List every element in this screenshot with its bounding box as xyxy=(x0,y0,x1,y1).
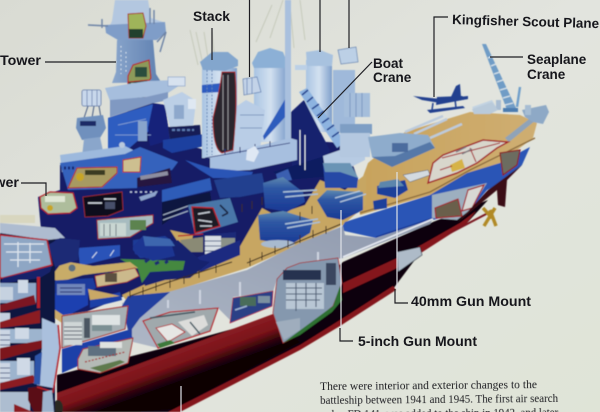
label: Seaplane Crane: Crane xyxy=(527,67,566,82)
radar director: centre xyxy=(233,77,265,158)
aft stacks and directors xyxy=(295,47,370,132)
propeller and shaft xyxy=(448,208,496,234)
deck railings xyxy=(130,197,341,298)
grey belt armour xyxy=(122,219,433,348)
body text paragraph: battleship between 1941 and 1945. The first air search xyxy=(320,392,558,407)
main navy superstructure mass xyxy=(38,103,360,322)
main mast xyxy=(285,0,291,142)
label: 40mm Gun Mount: 40mm Gun Mount xyxy=(411,294,532,309)
forward deck with green floor xyxy=(78,215,210,286)
interior cutaway: forward mid xyxy=(62,306,128,348)
stern gun tub xyxy=(373,179,408,210)
white leader lines on hull xyxy=(181,172,397,412)
main superstructure deck house aft xyxy=(162,130,345,225)
porthole on the bulge xyxy=(53,400,63,412)
fire control director: port side xyxy=(163,77,205,153)
deck tan mid xyxy=(122,174,366,305)
hull red lines xyxy=(168,211,476,412)
lower forward blue xyxy=(62,330,133,373)
40mm tub in hull xyxy=(397,247,422,272)
stern blue hull xyxy=(340,147,530,238)
aircraft deck details xyxy=(360,100,549,213)
label: Seaplane Crane: Seaplane xyxy=(527,52,587,67)
label: Stack: Stack xyxy=(193,9,230,24)
hull stern dark fin xyxy=(457,165,522,223)
radar director: forward xyxy=(76,90,106,157)
interior cutaway: stern low xyxy=(432,183,487,220)
stack: aft funnel xyxy=(252,48,287,142)
forward cross-section xyxy=(0,215,80,412)
cabin cutaways on the navy mass xyxy=(40,191,160,217)
stern deck xyxy=(358,112,537,215)
turret: midships group xyxy=(258,163,366,248)
interior cutaway: lower forward xyxy=(78,338,133,373)
interior cutaway: large midships xyxy=(273,258,342,343)
body text paragraph: There were interior and exterior changes to the xyxy=(320,378,537,393)
stern main turret xyxy=(340,116,462,167)
kingfisher scout plane xyxy=(413,84,468,113)
diagonal blue bow wedge xyxy=(62,292,170,350)
leader lines xyxy=(21,0,523,341)
cutaway gun mount and machinery xyxy=(133,198,240,272)
interior cutaway: midships low xyxy=(143,308,218,348)
label: Boat Crane: Boat xyxy=(373,56,404,71)
seaplane crane xyxy=(482,44,520,112)
interior cutaway: machinery xyxy=(230,291,273,323)
faint rigging lines xyxy=(190,0,305,65)
deck level forward xyxy=(40,261,139,323)
bridge cabins xyxy=(68,157,172,188)
hull black under-body xyxy=(57,200,488,412)
stern equipment behind plane xyxy=(472,102,498,114)
dark block behind the boat crane xyxy=(290,100,330,168)
label: 5-inch Gun Mount: 5-inch Gun Mount xyxy=(358,334,478,349)
label: Boat Crane: Crane xyxy=(373,70,412,85)
conning tower xyxy=(88,0,180,117)
interior cutaway: stern deck xyxy=(428,140,520,183)
label: Kingfisher Scout Plane: Kingfisher Scout Plane xyxy=(452,12,600,31)
red torpedo bulge xyxy=(57,314,300,412)
stack: forward funnel xyxy=(200,52,238,158)
boat crane xyxy=(299,88,365,170)
label: Tower: Tower xyxy=(0,53,42,68)
